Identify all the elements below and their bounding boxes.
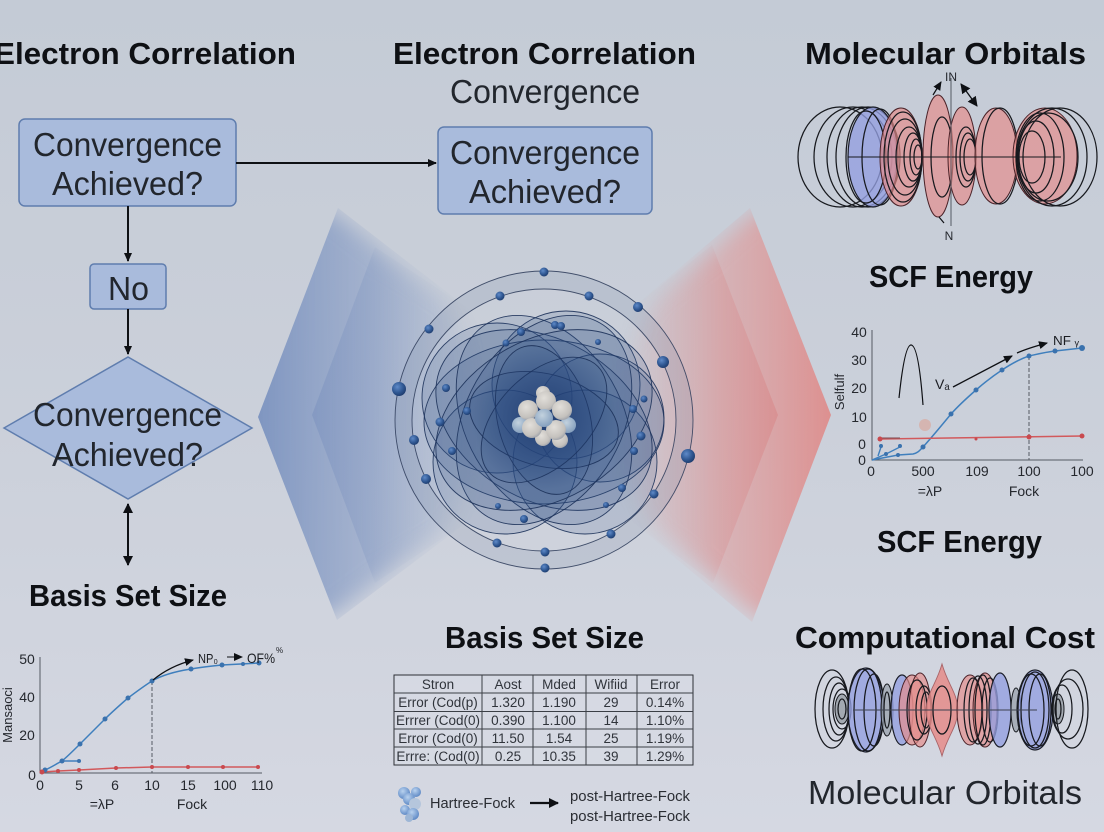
line chart: basis set size: 50	[19, 651, 35, 667]
data table: Mded	[542, 677, 576, 692]
line chart: scf energy: 20	[851, 380, 867, 396]
heading: computational cost: Computational Cost	[795, 620, 1095, 655]
line chart: scf energy: Selfulf	[832, 374, 847, 410]
line chart: basis set size: 110	[251, 777, 273, 793]
axes	[848, 70, 1061, 243]
molecular orbitals diagram bottom	[815, 664, 1088, 756]
blue lobes left	[848, 668, 913, 752]
axes: N	[945, 229, 953, 243]
decision diamond: Achieved?	[52, 436, 203, 473]
line chart: scf energy: 109	[965, 463, 989, 479]
line chart: basis set size	[0, 646, 283, 812]
data table: 1.29%	[646, 749, 684, 764]
arrow: box to box	[236, 162, 436, 164]
line chart: basis set size: 10	[144, 777, 160, 793]
line chart: basis set size: =λP	[90, 796, 114, 812]
line chart: basis set size: 6	[111, 777, 119, 793]
legend: post-hartree-fock: post-Hartree-Fock	[570, 808, 690, 825]
red lobes	[899, 664, 998, 756]
red wedge shapes	[636, 208, 831, 622]
data table: 10.35	[542, 749, 576, 764]
blue wedge shapes	[258, 208, 461, 620]
decision diamond: Convergence	[33, 396, 222, 433]
line chart: basis set size: 0	[28, 767, 36, 783]
data table: Stron	[422, 677, 454, 692]
subheading: convergence: Convergence	[450, 73, 640, 110]
line chart: scf energy	[832, 324, 1094, 499]
line chart: scf energy: NF ᵧ	[1053, 333, 1080, 348]
flow box: convergence achieved left	[19, 119, 236, 206]
dark core glow	[472, 346, 616, 490]
data table	[394, 675, 693, 765]
line chart: basis set size: NP₀	[198, 651, 218, 666]
flow box: convergence achieved left: Achieved?	[52, 165, 203, 202]
caption: molecular orbitals: Molecular Orbitals	[808, 774, 1082, 811]
flow box: convergence achieved centre: Convergence	[450, 134, 640, 171]
legend: post-hartree-fock	[570, 788, 690, 825]
line chart: basis set size: 40	[19, 689, 35, 705]
arrow: no to decision	[127, 309, 129, 354]
line chart: scf energy: Fock	[1009, 483, 1040, 499]
data table: 0.25	[495, 749, 521, 764]
line chart: scf energy: 500	[911, 463, 935, 479]
molecular orbitals diagram top	[798, 70, 1097, 243]
decision diamond	[4, 357, 252, 499]
heading: scf energy lower: SCF Energy	[877, 524, 1043, 559]
line chart: scf energy: 10	[851, 409, 867, 425]
left outline lobes	[798, 107, 900, 207]
line chart: basis set size: Mansaoci	[0, 687, 15, 743]
line chart: scf energy: 100	[1017, 463, 1041, 479]
data table: 1.10%	[646, 713, 684, 728]
nucleus	[512, 386, 576, 448]
molecule cluster icon	[398, 787, 421, 822]
legend: hartree-fock: Hartree-Fock	[430, 795, 515, 812]
flow box: convergence achieved left: Convergence	[33, 126, 222, 163]
double arrow	[127, 504, 129, 565]
overlapping orbital lobes	[404, 284, 684, 556]
blue lobes right	[989, 670, 1053, 750]
line chart: scf energy: 0	[858, 436, 866, 452]
data table: 1.100	[542, 713, 576, 728]
line chart: scf energy: 0	[858, 452, 866, 468]
data table: 1.19%	[646, 731, 684, 746]
right outline lobes	[1052, 670, 1088, 748]
line chart: basis set size: OF%	[247, 650, 275, 666]
line chart: basis set size: 15	[180, 777, 196, 793]
blue lobe	[848, 107, 898, 207]
arrow: hartree-fock to post-hartree-fock	[530, 802, 558, 804]
outer electron rings	[395, 271, 693, 569]
data table: Error (Cod(p)	[398, 695, 478, 710]
right outline lobes	[1017, 108, 1097, 206]
flow box: no: No	[108, 270, 149, 307]
flow box: convergence achieved centre: Achieved?	[469, 173, 621, 210]
line chart: scf energy: =λP	[918, 483, 942, 499]
heading: scf energy upper: SCF Energy	[869, 259, 1034, 294]
data table: 11.50	[492, 731, 524, 746]
arrow: down to no	[127, 206, 129, 261]
legend: post-hartree-fock: post-Hartree-Fock	[570, 788, 690, 805]
heading: basis set size left: Basis Set Size	[29, 578, 227, 613]
data table: 1.54	[546, 731, 573, 746]
axes: IN	[945, 70, 957, 84]
heading: basis set size centre: Basis Set Size	[445, 620, 644, 655]
data table: Aost	[494, 677, 522, 692]
heading: molecular orbitals: Molecular Orbitals	[805, 36, 1086, 71]
data table: 0.14%	[646, 695, 684, 710]
data table: Errre: (Cod(0)	[396, 749, 480, 764]
heading: electron correlation centre: Electron Correlation	[393, 36, 696, 71]
flow box: no	[90, 264, 166, 309]
data table: 0.390	[491, 713, 525, 728]
heading: electron correlation left: Electron Correlation	[0, 36, 296, 71]
flow box: convergence achieved centre	[438, 127, 652, 214]
data table: 1.190	[542, 695, 576, 710]
line chart: basis set size: 20	[19, 727, 35, 743]
data table: 25	[603, 731, 619, 746]
atom diagram	[392, 268, 695, 572]
line chart: basis set size: 100	[213, 777, 237, 793]
data table: 1.320	[491, 695, 525, 710]
electrons	[392, 268, 695, 572]
data table: Errrer (Cod(0)	[396, 713, 480, 728]
line chart: scf energy: 0	[867, 463, 875, 479]
data table: Error (Cod(0)	[398, 731, 478, 746]
line chart: scf energy: 40	[851, 324, 867, 340]
line chart: basis set size: %	[276, 646, 283, 655]
line chart: scf energy: Vₐ	[935, 376, 950, 392]
data table: 14	[603, 713, 619, 728]
line chart: basis set size: Fock	[177, 796, 208, 812]
data table: Wifiid	[594, 677, 628, 692]
data table: 29	[603, 695, 619, 710]
data table: Error	[650, 677, 681, 692]
line chart: basis set size: 5	[75, 777, 83, 793]
line chart: basis set size: 0	[36, 777, 44, 793]
red lobes	[846, 95, 1077, 217]
line chart: scf energy: 30	[851, 352, 867, 368]
line chart: scf energy: 100	[1070, 463, 1094, 479]
left outline lobes	[815, 670, 851, 748]
data table: 39	[603, 749, 619, 764]
